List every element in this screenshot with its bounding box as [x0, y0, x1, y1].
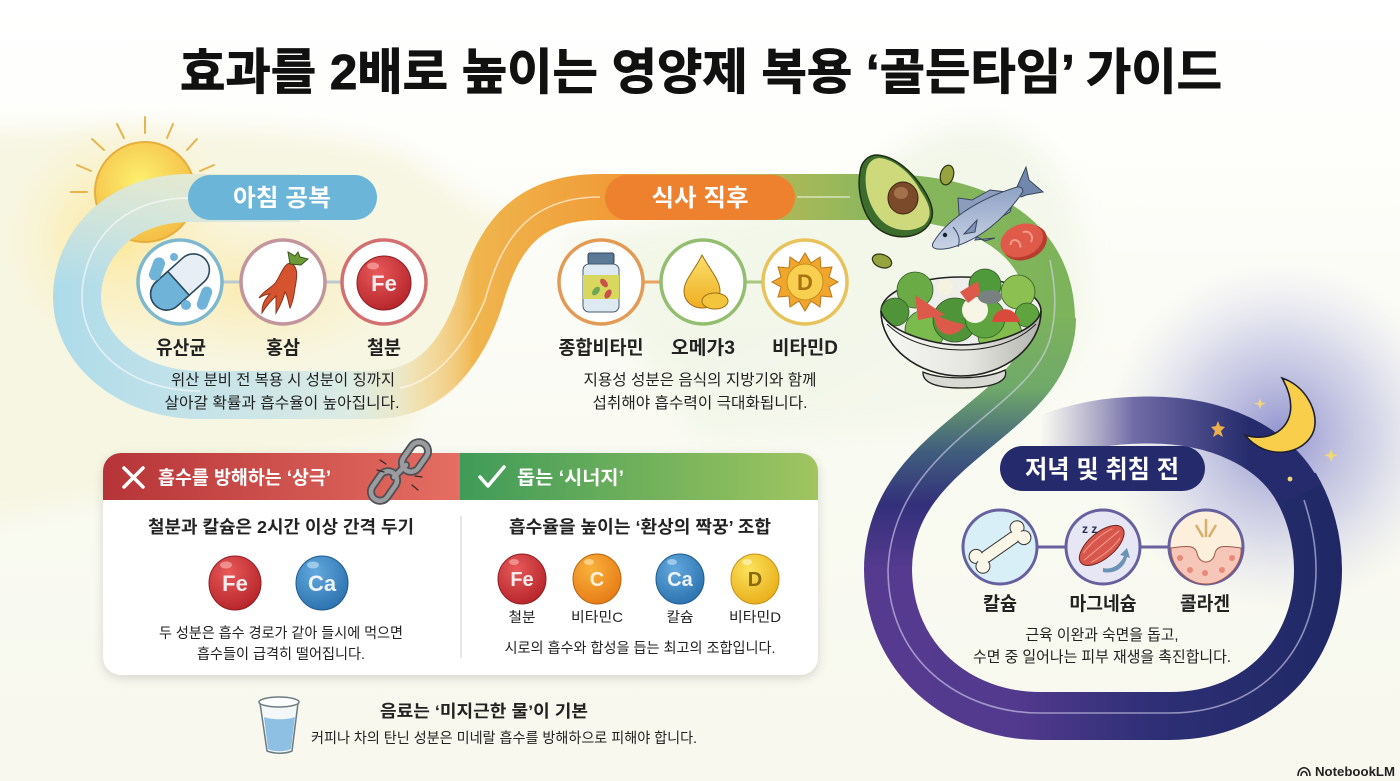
morning badge: [188, 175, 377, 220]
after-meal labels: 오메가3: [671, 337, 735, 359]
header: antagonism: [103, 453, 460, 500]
ball labels: 칼슘: [666, 609, 694, 625]
morning description: 위산 분비 전 복용 시 성분이 징까지: [171, 371, 395, 389]
ball labels: 철분: [508, 609, 536, 625]
icon: collagen skin: [1169, 510, 1243, 584]
panel: morning: [138, 175, 426, 412]
evening description: [973, 626, 1231, 666]
morning labels: 유산균: [156, 337, 206, 359]
after-meal labels: 종합비타민: [558, 337, 644, 359]
icon: glass of water: [259, 697, 299, 753]
icon: iron: [342, 240, 426, 324]
ball: Ca: [656, 554, 704, 604]
header: synergy: [460, 453, 818, 500]
ball: Ca: Ca: [308, 571, 337, 596]
beverage note: [311, 702, 697, 747]
evening description: 수면 중 일어나는 피부 재생을 촉진합니다.: [973, 648, 1231, 666]
panel: interactions: [103, 439, 818, 675]
panel: after meal: [558, 175, 847, 412]
divider: [460, 516, 462, 658]
ball: vitamin D: D: [748, 569, 762, 591]
evening labels: 콜라겐: [1180, 593, 1230, 615]
ball: Fe: Fe: [222, 571, 248, 596]
connectors: [222, 280, 342, 284]
header: synergy: 돕는 ‘시너지’: [517, 467, 624, 489]
ball: vitamin C: C: [590, 569, 604, 591]
after-meal badge: 식사 직후: [652, 185, 748, 212]
icon: sun: [71, 117, 214, 242]
ball: Fe: [209, 556, 261, 610]
icon: moon and stars: [1211, 378, 1338, 481]
evening labels: [983, 593, 1230, 615]
synergy description: 시로의 흡수와 합성을 듭는 최고의 조합입니다.: [504, 640, 776, 657]
evening badge: [1000, 446, 1205, 491]
morning description: 살아갈 확률과 흡수율이 높아집니다.: [164, 394, 400, 412]
synergy content: [498, 517, 781, 657]
antagonism description: 흡수들이 급격히 떨어집니다.: [197, 646, 365, 663]
icon: vitamin D sun: [763, 240, 847, 324]
morning labels: 홍삼: [266, 337, 300, 359]
morning badge: 아침 공복: [233, 185, 331, 212]
ball: vitamin D: [731, 554, 779, 604]
title: 효과를 2배로 높이는 영양제 복용 ‘골든타임’ 가이드: [180, 46, 1222, 100]
icon: fish: [932, 167, 1043, 249]
evening labels: 칼슘: [983, 593, 1017, 615]
antagonism description: [159, 625, 403, 663]
connectors: [644, 280, 664, 284]
evening labels: 마그네슘: [1070, 593, 1136, 615]
evening description: 근육 이완과 숙면을 돕고,: [1026, 626, 1178, 644]
after-meal description: 섭취해야 흡수력이 극대화됩니다.: [592, 394, 808, 412]
morning labels: [156, 337, 401, 359]
icon: calcium bone: [963, 510, 1037, 584]
synergy content: 흡수율을 높이는 ‘환상의 짝꿍’ 조합: [509, 517, 771, 537]
after-meal badge: [605, 175, 795, 220]
beverage note: 커피나 차의 탄닌 성분은 미네랄 흡수를 방해하으로 피해야 합니다.: [311, 730, 697, 747]
icon: broken chain: [367, 439, 432, 504]
connectors: [1036, 546, 1170, 548]
icon: probiotics capsule: [138, 240, 222, 324]
after-meal labels: 비타민D: [772, 337, 838, 359]
icon: red ginseng: [241, 240, 325, 324]
antagonism content: 철분과 칼슘은 2시간 이상 간격 두기: [148, 517, 414, 537]
icon: vitamin D sun: D: [797, 270, 813, 295]
path ribbon: daily timeline: [77, 197, 1318, 716]
icon: magnesium muscle: [1066, 510, 1140, 584]
evening badge: 저녁 및 취침 전: [1025, 456, 1179, 484]
after-meal description: [584, 371, 816, 412]
icon: magnesium muscle: z z: [1082, 522, 1097, 536]
antagonism description: 두 성분은 흡수 경로가 같아 들시에 먹으면: [159, 625, 403, 642]
after-meal description: 지용성 성분은 음식의 지방기와 함께: [584, 371, 816, 389]
icon: omega-3 drop: [661, 240, 745, 324]
icon: tomato slice: [995, 216, 1052, 267]
icon: olives: [870, 164, 956, 271]
ball labels: 비타민C: [571, 609, 623, 625]
antagonism content: [148, 517, 414, 663]
morning description: [164, 371, 400, 412]
ball labels: [508, 609, 781, 625]
ball: Fe: [498, 554, 546, 604]
panel: evening: [963, 378, 1338, 666]
ball: vitamin C: [573, 554, 621, 604]
after-meal labels: [558, 337, 838, 359]
ball: Ca: [296, 556, 348, 610]
icon: iron: Fe: [371, 271, 397, 296]
beverage note: 음료는 ‘미지근한 물’이 기본: [380, 702, 588, 721]
icon: salad bowl: [881, 269, 1041, 388]
morning labels: 철분: [367, 337, 401, 359]
ball: Fe: Fe: [510, 569, 534, 591]
illustration: healthy food: [859, 155, 1052, 388]
icon: avocado: [859, 155, 932, 237]
ball labels: 비타민D: [729, 609, 781, 625]
watermark: NotebookLM: NotebookLM: [1315, 764, 1395, 779]
header: antagonism: 흡수를 방해하는 ‘상극’: [158, 467, 331, 489]
icon: multivitamin bottle: [559, 240, 643, 324]
ball: Ca: Ca: [667, 569, 694, 591]
